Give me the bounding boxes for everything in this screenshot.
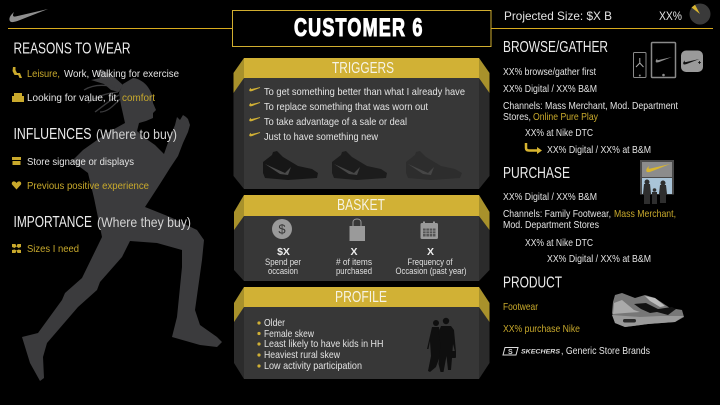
shoe image xyxy=(612,293,684,327)
metric: frequency: Occasion (past year) xyxy=(396,266,467,276)
metric: items: # of items xyxy=(336,257,372,267)
heading: triggers: TRIGGERS xyxy=(332,60,394,77)
profile list: Female skew xyxy=(264,328,314,340)
title box xyxy=(232,10,491,46)
reasons to wear section: Leisure, xyxy=(27,68,60,80)
trigger list: To get something better than what I already have xyxy=(264,86,465,98)
icon: couple silhouette xyxy=(427,318,456,372)
importance section: (Where they buy) xyxy=(97,214,191,230)
browse/gather section: Channels: Mass Merchant, Mod. Department xyxy=(503,100,678,112)
metric: items xyxy=(336,246,372,276)
brand logo: skechers: S xyxy=(508,349,513,356)
icon: nike plus app xyxy=(681,50,703,72)
product section: Footwear xyxy=(503,301,538,313)
influences section xyxy=(12,126,177,192)
metric: spend: Spend per xyxy=(265,257,301,267)
metric: frequency: Frequency of xyxy=(408,257,453,267)
profile list: Least likely to have kids in HH xyxy=(264,338,384,350)
icon: heart xyxy=(12,181,21,190)
projected size header xyxy=(504,4,710,24)
importance section xyxy=(12,214,191,255)
browse/gather section: BROWSE/GATHER xyxy=(503,39,608,56)
icon: store front xyxy=(640,160,674,204)
icon: sizing arrows xyxy=(12,244,21,253)
reasons to wear section: comfort xyxy=(122,92,155,104)
browse/gather section: XX% Digital / XX% B&M xyxy=(503,83,597,95)
trigger list: To replace something that was worn out xyxy=(264,101,428,113)
browse/gather section xyxy=(503,39,678,156)
profile list xyxy=(257,317,384,372)
header rule xyxy=(8,28,713,30)
purchase section: Mod. Department Stores xyxy=(503,219,599,231)
arrow xyxy=(526,143,542,154)
projected size header: Projected Size: $X B xyxy=(504,9,612,23)
metric: items: X xyxy=(350,246,358,258)
panel: triggers xyxy=(234,58,490,189)
reasons to wear section xyxy=(12,40,179,104)
heading: basket: BASKET xyxy=(337,197,385,214)
icon: phone xyxy=(634,52,646,78)
metric: spend: $X xyxy=(277,246,290,258)
runner silhouette xyxy=(22,69,222,381)
purchase section: Mass Merchant, xyxy=(614,208,676,220)
influences section: (Where to buy) xyxy=(96,126,177,142)
pie chart xyxy=(690,4,710,24)
trigger list: Just to have something new xyxy=(264,131,378,143)
brand logo: skechers xyxy=(503,348,560,356)
importance section: IMPORTANCE xyxy=(14,214,92,231)
heading: profile: PROFILE xyxy=(335,289,387,306)
browse/gather section: Online Pure Play xyxy=(533,111,599,123)
browse/gather section: Stores, xyxy=(503,111,531,123)
metric: spend: occasion xyxy=(268,266,298,276)
purchase section: XX% Digital / XX% B&M xyxy=(503,191,597,203)
panel: profile xyxy=(234,287,490,379)
profile list: Older xyxy=(264,317,285,329)
metric: frequency xyxy=(396,246,467,276)
importance section: Sizes I need xyxy=(27,243,79,255)
panel: basket xyxy=(234,195,490,281)
metric: spend xyxy=(265,246,301,276)
brand logo: skechers: SKECHERS xyxy=(521,350,560,356)
browse/gather section: XX% at Nike DTC xyxy=(525,127,593,139)
purchase section: XX% Digital / XX% at B&M xyxy=(547,253,651,265)
icon: calendar xyxy=(420,222,438,239)
icon: dollar: $ xyxy=(278,222,286,236)
browse/gather section: XX% browse/gather first xyxy=(503,66,596,78)
trigger list xyxy=(250,86,465,143)
reasons to wear section: Looking for value, fit, xyxy=(27,92,119,104)
icon: tablet xyxy=(652,42,676,78)
icon: shopping bag xyxy=(350,219,365,241)
purchase section xyxy=(503,165,676,265)
reasons to wear section: REASONS TO WEAR xyxy=(14,40,130,58)
title box: CUSTOMER 6 xyxy=(294,13,424,42)
metric: frequency: X xyxy=(427,246,434,258)
browse/gather section: XX% Digital / XX% at B&M xyxy=(547,144,651,156)
influences section: INFLUENCES xyxy=(14,126,92,143)
product section: PRODUCT xyxy=(503,274,562,292)
product section xyxy=(503,274,650,357)
icon: store xyxy=(12,157,21,165)
trigger list: To take advantage of a sale or deal xyxy=(264,116,407,128)
purchase section: Channels: Family Footwear, xyxy=(503,208,611,220)
shoe row xyxy=(263,151,462,180)
influences section: Previous positive experience xyxy=(27,180,149,192)
purchase section: XX% at Nike DTC xyxy=(525,237,593,249)
icon: seated person xyxy=(13,67,22,78)
icon: dollar xyxy=(272,219,292,239)
profile list: Low activity participation xyxy=(264,360,362,372)
product section: XX% purchase Nike xyxy=(503,323,580,335)
product section: , Generic Store Brands xyxy=(561,345,650,357)
nike swoosh logo xyxy=(9,9,48,22)
purchase section: PURCHASE xyxy=(503,165,570,182)
profile list: Heaviest rural skew xyxy=(264,349,340,361)
icon: sofa xyxy=(12,93,24,102)
influences section: Store signage or displays xyxy=(27,156,134,168)
metric: items: purchased xyxy=(336,266,372,276)
reasons to wear section: Work, Walking for exercise xyxy=(64,68,179,80)
projected size header: XX% xyxy=(659,9,682,23)
